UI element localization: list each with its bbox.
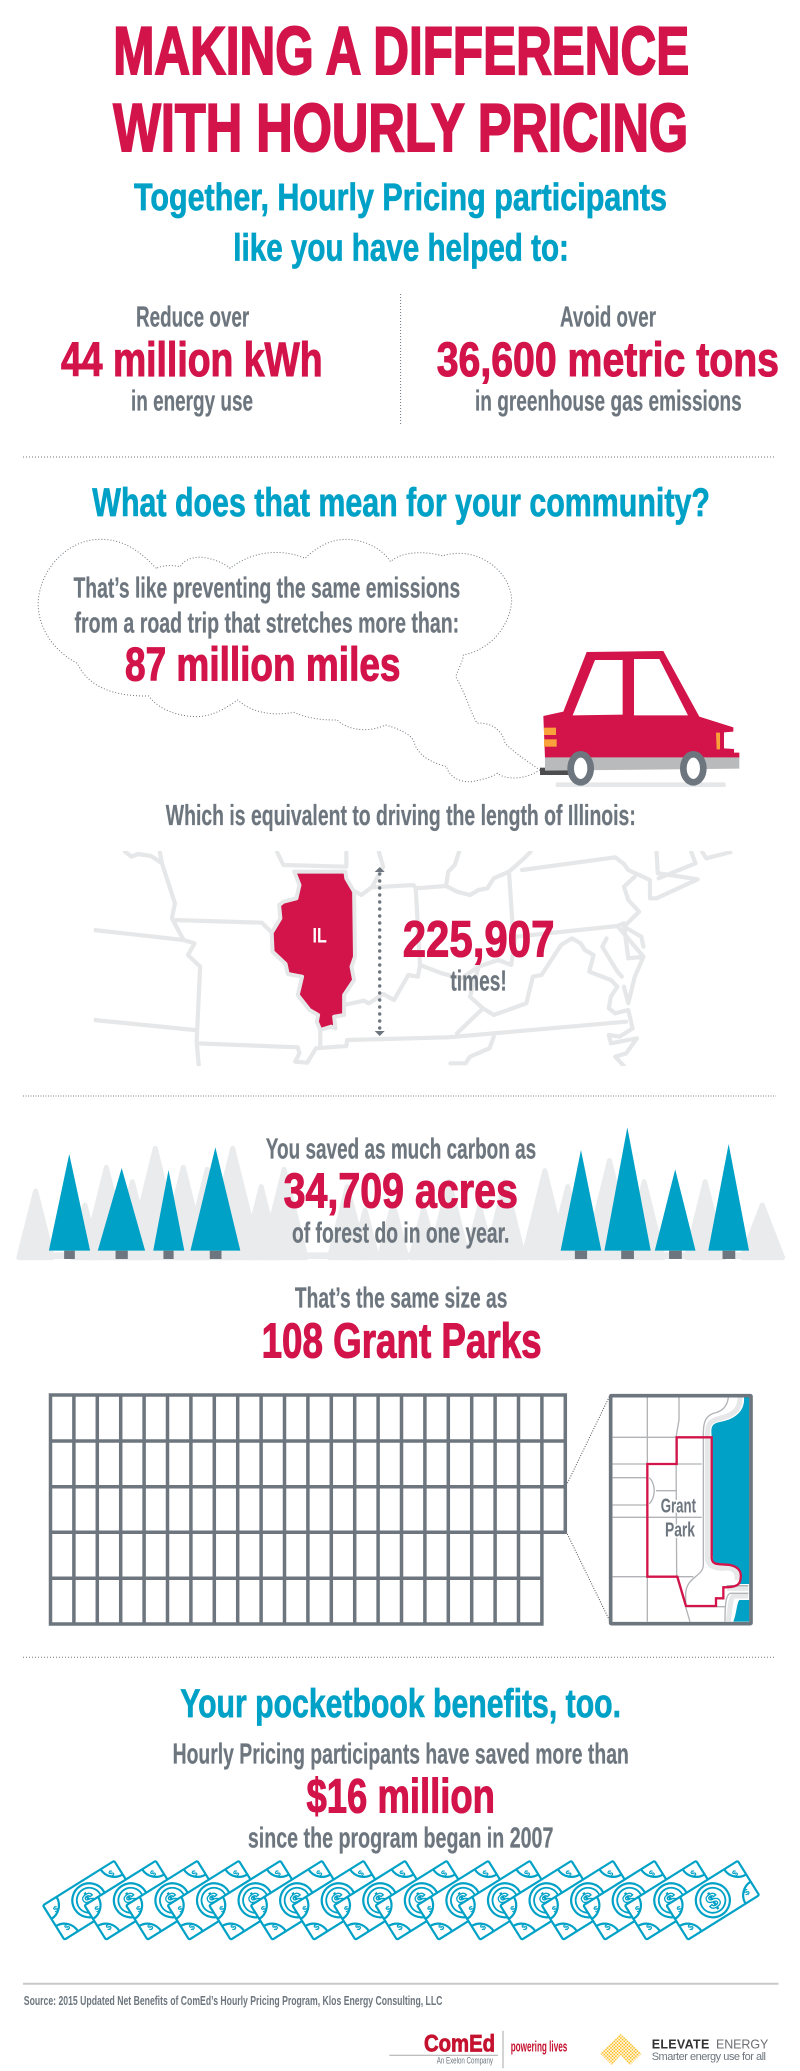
bill 11: $ — [478, 1922, 488, 1933]
bill 9: $ — [410, 1887, 434, 1915]
state: Illinois — [272, 872, 355, 1030]
bill 8: $ — [409, 1887, 419, 1898]
bill 11 — [459, 1861, 551, 1940]
logo: ComEd: powering lives — [511, 2039, 567, 2056]
bill 16: $ — [701, 1887, 725, 1915]
bill 5: $ — [218, 1904, 227, 1915]
subtitle — [134, 177, 667, 270]
bill 5 — [209, 1861, 302, 1940]
label: Grant Park: Grant — [661, 1496, 696, 1518]
label: Grant Park — [661, 1496, 696, 1542]
bill 1 — [43, 1861, 136, 1940]
arrow: length of Illinois — [375, 867, 385, 1036]
bill 9: $ — [451, 1887, 460, 1898]
bill 6: $ — [286, 1887, 309, 1915]
cloud text: That’s like preventing the same emissions — [74, 573, 460, 605]
icon: car — [540, 651, 739, 787]
bill 2: $ — [148, 1868, 158, 1879]
bill 15 — [625, 1861, 718, 1940]
bill 13: $ — [561, 1922, 571, 1933]
bill 15: $ — [660, 1887, 683, 1915]
text: savings: since the program began in 2007 — [248, 1823, 553, 1855]
stat: times — [403, 911, 554, 998]
logo: Elevate Energy: Smarter energy use for all — [652, 2051, 766, 2063]
bill 10: $ — [425, 1904, 435, 1915]
cloud text: from a road trip that stretches more than: — [74, 608, 459, 640]
bill 3: $ — [146, 1922, 155, 1933]
subtitle: like you have helped to: — [233, 228, 569, 270]
logo: ComEd: An Exelon Company — [437, 2055, 493, 2065]
source note: Source: 2015 Updated Net Benefits of ComEd’s Hourly Pricing Program, Klos Energy Consulting, LLC — [24, 1994, 442, 2008]
logo: Elevate Energy — [600, 2034, 769, 2065]
bill 16: $ — [742, 1887, 751, 1898]
bill 4: $ — [243, 1887, 253, 1898]
forest background — [19, 1148, 783, 1259]
bill 15: $ — [633, 1904, 643, 1915]
teal trees right — [561, 1127, 749, 1259]
bill 7: $ — [312, 1922, 321, 1933]
text: savings — [173, 1738, 629, 1855]
text: forest carbon: 34,709 acres — [284, 1165, 518, 1219]
bill 8: $ — [353, 1922, 363, 1933]
bill 6: $ — [326, 1887, 336, 1898]
bill 13: $ — [550, 1904, 560, 1915]
text: Grant Parks: That’s the same size as — [295, 1283, 507, 1315]
bill 14: $ — [659, 1887, 668, 1898]
text: savings: $16 million — [306, 1771, 495, 1824]
bill 4: $ — [176, 1904, 186, 1915]
bill 8 — [334, 1861, 427, 1940]
cloud text — [74, 573, 460, 691]
bill 15: $ — [689, 1868, 698, 1879]
bill 9: $ — [384, 1904, 393, 1915]
label: IL: IL — [312, 925, 327, 948]
teal trees left — [49, 1147, 240, 1259]
stat: times: 225,907 — [403, 911, 554, 968]
bill 14: $ — [592, 1904, 601, 1915]
map: Midwest and East states — [94, 852, 732, 1066]
bill 14: $ — [603, 1922, 612, 1933]
bill 1: $ — [78, 1887, 101, 1915]
bill 13: $ — [617, 1887, 627, 1898]
bill 13 — [542, 1861, 634, 1940]
zoom lines to inset — [567, 1397, 609, 1620]
bill 4: $ — [187, 1922, 197, 1933]
text: Grant Parks — [262, 1283, 542, 1368]
bill 4 — [168, 1861, 260, 1940]
text: forest carbon: of forest do in one year. — [292, 1217, 509, 1249]
stat: emissions avoided: Avoid over — [560, 302, 656, 334]
bill 7 — [292, 1861, 385, 1940]
title — [113, 13, 689, 166]
bill 12: $ — [520, 1922, 529, 1933]
bill 2: $ — [104, 1922, 113, 1933]
bill 3 — [126, 1861, 219, 1940]
bill 9: $ — [395, 1922, 404, 1933]
stat: emissions avoided — [437, 302, 779, 418]
bill 3: $ — [201, 1887, 211, 1898]
label: Grant Park: Park — [665, 1520, 696, 1542]
bill 5: $ — [273, 1868, 283, 1879]
bill 5: $ — [244, 1887, 268, 1915]
bill 7: $ — [327, 1887, 351, 1915]
bill 4: $ — [231, 1868, 241, 1879]
logo: ComEd — [389, 2031, 567, 2068]
stat: energy reduced — [61, 302, 323, 418]
bill 2: $ — [119, 1887, 143, 1915]
bill 14: $ — [647, 1868, 657, 1879]
bill 2: $ — [93, 1904, 102, 1915]
subtitle: Together, Hourly Pricing participants — [134, 177, 667, 219]
bill 8: $ — [398, 1868, 407, 1879]
bill 1: $ — [51, 1904, 61, 1915]
exhaust cloud — [38, 539, 540, 782]
bill 2: $ — [160, 1887, 169, 1898]
bill 7: $ — [368, 1887, 377, 1898]
stat: energy reduced: Reduce over — [136, 302, 249, 334]
stat: energy reduced: 44 million kWh — [61, 334, 323, 387]
bill 11: $ — [493, 1887, 517, 1915]
bill 12: $ — [564, 1868, 574, 1879]
bill 16 — [666, 1861, 759, 1940]
grid: 108 park blocks — [50, 1395, 565, 1624]
bill 10: $ — [452, 1887, 476, 1915]
bill 15: $ — [700, 1887, 710, 1898]
logo: Elevate Energy: ELEVATE — [652, 2037, 709, 2051]
bill 13: $ — [606, 1868, 615, 1879]
bill 11: $ — [522, 1868, 532, 1879]
bill 12: $ — [576, 1887, 585, 1898]
bill 14 — [583, 1861, 676, 1940]
bill 11: $ — [467, 1904, 476, 1915]
bill 5: $ — [285, 1887, 294, 1898]
bill 6: $ — [270, 1922, 280, 1933]
logo: Elevate Energy: ENERGY — [716, 2037, 769, 2051]
bill 10: $ — [481, 1868, 490, 1879]
bill 12: $ — [535, 1887, 559, 1915]
stat: times: times! — [450, 966, 507, 998]
bill 12: $ — [509, 1904, 518, 1915]
bill 11: $ — [534, 1887, 544, 1898]
text: forest carbon: You saved as much carbon as — [266, 1133, 536, 1165]
bill 1: $ — [118, 1887, 128, 1898]
bill 13: $ — [577, 1887, 600, 1915]
vertical divider — [400, 294, 402, 424]
bill 8: $ — [342, 1904, 352, 1915]
bill 10: $ — [492, 1887, 502, 1898]
text: Grant Parks: 108 Grant Parks — [262, 1314, 542, 1368]
bill 6 — [251, 1861, 343, 1940]
bill 4: $ — [202, 1887, 226, 1915]
stat: energy reduced: in energy use — [131, 386, 253, 418]
heading: pocketbook: Your pocketbook benefits, too. — [180, 1682, 621, 1726]
bill 9: $ — [439, 1868, 449, 1879]
bill 14: $ — [618, 1887, 642, 1915]
inset map: Grant Park — [611, 1396, 751, 1624]
bill 6: $ — [315, 1868, 324, 1879]
bill 5: $ — [229, 1922, 238, 1933]
bill 1: $ — [62, 1922, 72, 1933]
bill 10 — [417, 1861, 510, 1940]
bill 16: $ — [675, 1904, 684, 1915]
bill 15: $ — [644, 1922, 654, 1933]
bill 2 — [84, 1861, 177, 1940]
dollar bills row — [43, 1861, 759, 1940]
cloud text: 87 million miles — [125, 638, 400, 691]
bill 10: $ — [436, 1922, 446, 1933]
bill 3: $ — [161, 1887, 185, 1915]
bill 7: $ — [356, 1868, 366, 1879]
bill 7: $ — [301, 1904, 310, 1915]
bill 3: $ — [134, 1904, 144, 1915]
bill 1: $ — [107, 1868, 116, 1879]
bill 6: $ — [259, 1904, 269, 1915]
bill 12 — [500, 1861, 593, 1940]
bill 16: $ — [730, 1868, 740, 1879]
bill 3: $ — [190, 1868, 199, 1879]
text: forest carbon — [266, 1133, 536, 1249]
bill 8: $ — [369, 1887, 392, 1915]
bill 9 — [375, 1861, 468, 1940]
bill 16: $ — [686, 1922, 695, 1933]
logo: ComEd: ComEd — [424, 2031, 495, 2058]
